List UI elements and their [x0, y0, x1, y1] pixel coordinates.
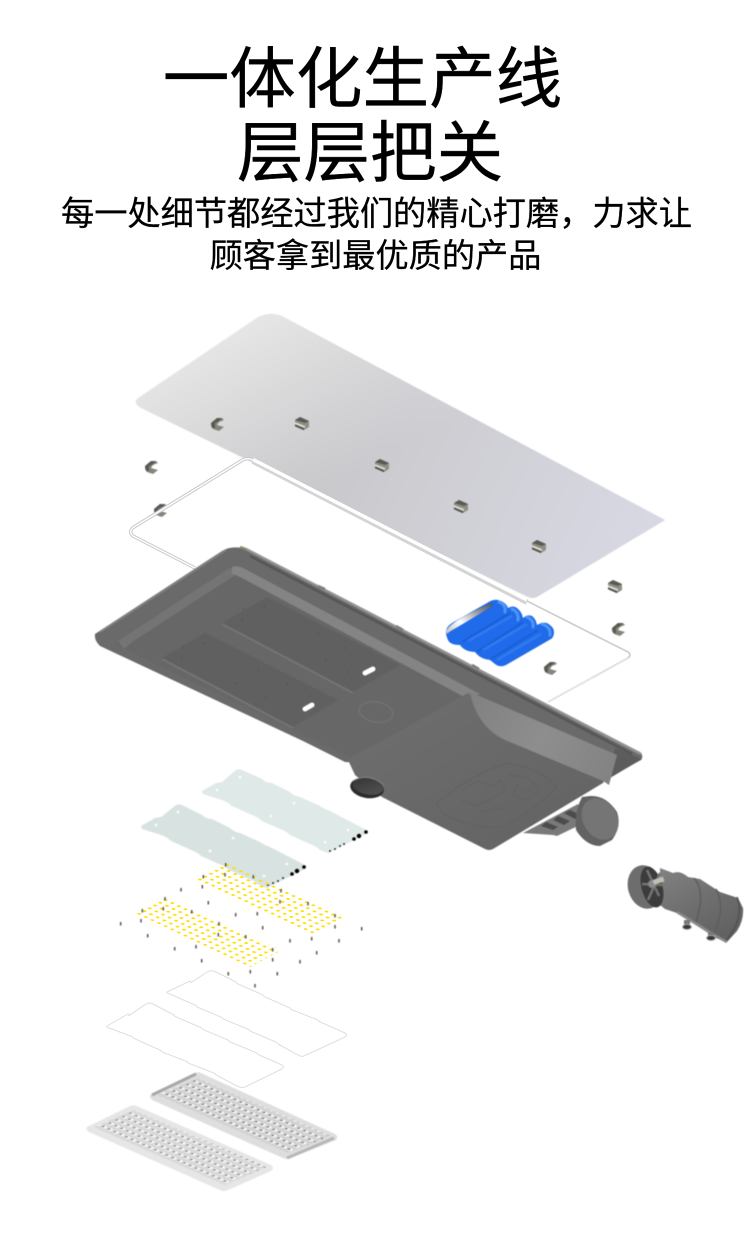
LED driver board upper: [202, 769, 368, 853]
sealing gasket lower: [107, 1003, 284, 1088]
lens array upper: [150, 1072, 337, 1159]
recess screw holes: [181, 643, 311, 698]
battery silver end: [446, 603, 493, 634]
mounting slot: [365, 669, 373, 673]
cover curved strip: [470, 692, 617, 785]
screws: [121, 863, 362, 988]
cable port circle: [358, 699, 394, 725]
mount face: [636, 864, 668, 910]
subtitle: [61, 196, 692, 275]
inner tray: [118, 567, 474, 757]
battery pack: [446, 600, 554, 666]
recess screw holes: [242, 606, 376, 672]
loose clips: [145, 461, 625, 675]
black knob: [349, 775, 385, 801]
tube body: [660, 868, 743, 942]
LED chip array lower: [135, 897, 282, 967]
battery cover: [348, 693, 617, 850]
LED driver board lower: [141, 804, 307, 888]
tray left bevel: [118, 568, 240, 649]
tray right bevel: [232, 566, 480, 698]
solar panel: [136, 314, 665, 598]
board holes and contacts: [155, 811, 288, 877]
LED chip array upper: [195, 862, 345, 935]
LED board recess 1: [222, 597, 400, 693]
hinge bracket: [523, 791, 626, 847]
title: [163, 43, 562, 191]
pole mount: [623, 861, 743, 942]
mounting slot: [305, 705, 312, 709]
title: 层层把关: [237, 117, 503, 191]
back disc: [623, 861, 667, 913]
title: 一体化生产线: [163, 43, 562, 117]
globe emboss: [437, 763, 557, 827]
white frame gasket: [131, 459, 630, 702]
LED board recess 2: [162, 633, 338, 728]
luminaire housing: [95, 547, 642, 850]
tail edge: [610, 748, 642, 778]
panel mounting clips: [211, 417, 546, 553]
outer rim: [95, 547, 642, 777]
board holes and contacts: [216, 776, 349, 843]
sealing gasket upper: [167, 971, 346, 1056]
lens array lower: [86, 1105, 273, 1191]
bolts: [682, 920, 716, 940]
subtitle: 每一处细节都经过我们的精心打磨，力求让: [61, 196, 692, 233]
hinge cylinder: [576, 796, 619, 846]
subtitle: 顾客拿到最优质的产品: [210, 238, 541, 275]
